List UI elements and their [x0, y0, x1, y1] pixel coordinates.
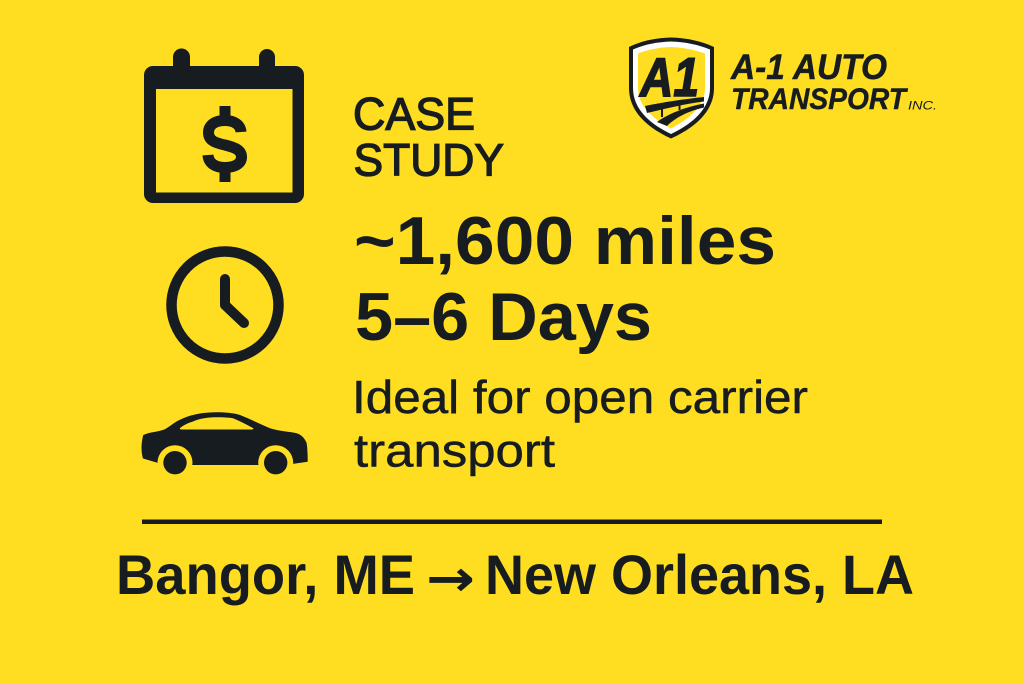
icon: clock — [172, 252, 278, 358]
description: transport — [354, 424, 555, 476]
logo shield: A1 — [638, 46, 699, 108]
logo wordmark line 2: TRANSPORT — [731, 83, 909, 116]
heading: case study: CASE — [353, 88, 475, 140]
logo: A-1 Auto Transport — [629, 38, 937, 138]
description: Ideal for open carrier — [352, 371, 808, 423]
route — [116, 543, 914, 608]
route: → — [426, 550, 475, 608]
logo suffix: INC. — [908, 98, 937, 112]
icon: calendar with dollar sign — [144, 48, 304, 203]
route: New Orleans, LA — [485, 543, 914, 606]
divider line — [142, 520, 882, 524]
stat: distance: ~1,600 miles — [354, 203, 776, 279]
route: Bangor, ME — [116, 543, 415, 606]
logo shield — [629, 38, 714, 138]
heading: case study — [353, 88, 504, 186]
icon: car — [142, 412, 308, 480]
stat: duration: 5–6 Days — [355, 279, 652, 355]
description — [352, 371, 808, 476]
heading: case study: STUDY — [354, 134, 504, 186]
logo wordmark line 1: A-1 AUTO — [730, 48, 887, 87]
